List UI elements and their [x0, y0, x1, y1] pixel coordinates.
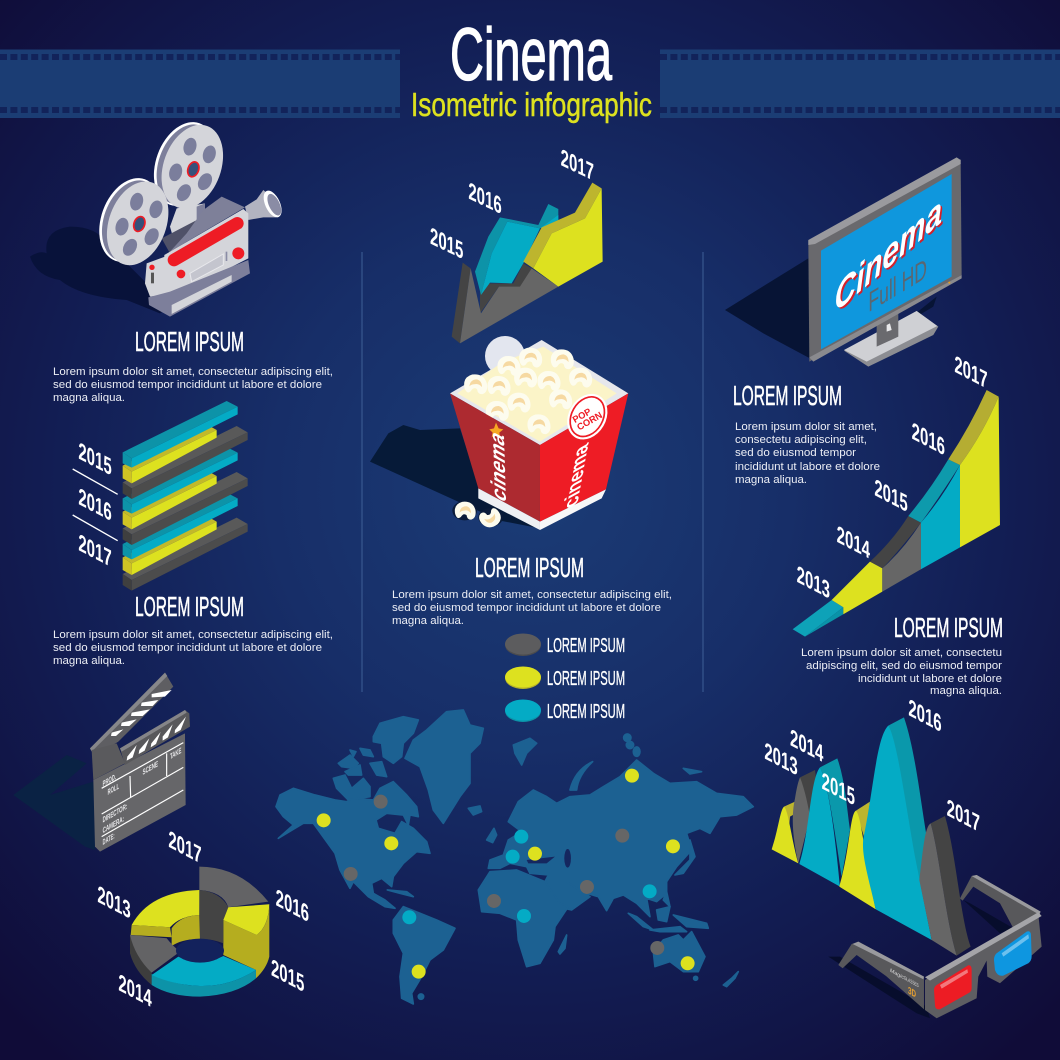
text block: bars: sed do eiusmod tempor incididunt ut labore et dolore [53, 642, 322, 654]
film strip right [660, 50, 1060, 118]
icon: 3d glasses: 3D [908, 985, 916, 1001]
chart: mountain peaks 2013-2017: 2014 [790, 724, 824, 768]
text block: rising area: adipiscing elit, sed do eiusmod tempor [806, 660, 1002, 672]
text block: bars: magna aliqua. [53, 655, 125, 667]
legend: LOREM IPSUM [547, 635, 625, 657]
icon: clapperboard [13, 673, 190, 852]
subtitle: Isometric infographic [411, 86, 652, 123]
text block: tv: consectetu adipiscing elit, [735, 434, 867, 446]
legend [505, 634, 625, 723]
text block: projector: sed do eiusmod tempor incididunt ut labore et dolore [53, 379, 322, 391]
text block: projector: magna aliqua. [53, 392, 125, 404]
icon: clapperboard: SCENE [143, 759, 158, 777]
chart: area 2015-2017: 2015 [430, 222, 463, 265]
icon: 3d glasses: Magic [890, 968, 904, 981]
badge: pop corn: CORN [575, 410, 604, 432]
icon: tv monitor [725, 157, 962, 367]
icon: tv monitor: Cinema [835, 186, 942, 322]
chart: stacked isometric bars: 2017 [78, 529, 112, 573]
badge: pop corn: POP [571, 406, 593, 425]
chart: area 2015-2017: 2016 [468, 177, 502, 220]
chart: isometric donut: 2015 [271, 954, 304, 998]
film strip left [0, 50, 400, 118]
text block: popcorn: sed do eiusmod tempor incididunt ut labore et dolore [392, 602, 661, 614]
heading: projector: LOREM IPSUM [135, 326, 244, 357]
text: cinema left: cinema [486, 426, 511, 506]
text block: popcorn: magna aliqua. [392, 615, 464, 627]
text block: rising area: incididunt ut labore et dolore [858, 673, 1002, 685]
chart: rising area 2013-2017 [793, 351, 1000, 637]
chart: isometric donut: 2014 [118, 969, 152, 1013]
text block: popcorn: Lorem ipsum dolor sit amet, consectetur adipiscing elit, [392, 589, 672, 601]
chart: rising area 2013-2017: 2016 [912, 418, 945, 461]
legend: LOREM IPSUM [547, 668, 625, 690]
chart: area 2015-2017 [430, 144, 603, 343]
text: cinema right face: cinema [560, 438, 594, 514]
chart: mountain peaks 2013-2017: 2016 [908, 694, 942, 738]
icon: tv monitor: Cinema [836, 187, 944, 323]
chart: rising area 2013-2017: 2015 [874, 474, 908, 518]
text block: projector [53, 366, 333, 404]
chart: area 2015-2017: 2017 [561, 144, 594, 187]
text block: projector: Lorem ipsum dolor sit amet, consectetur adipiscing elit, [53, 366, 333, 378]
icon: clapperboard: DATE: [103, 831, 115, 847]
chart: rising area 2013-2017: 2014 [837, 521, 870, 565]
chart: stacked isometric bars: 2016 [78, 483, 112, 527]
icon: clapperboard: PROD. [103, 772, 116, 789]
popcorn kernels on floor [452, 501, 504, 531]
badge: pop corn [559, 387, 615, 447]
text block: bars: Lorem ipsum dolor sit amet, consectetur adipiscing elit, [53, 629, 333, 641]
text block: tv: magna aliqua. [735, 474, 807, 486]
chart: stacked isometric bars: 2015 [78, 438, 112, 481]
chart: isometric donut: 2017 [168, 826, 202, 870]
text block: popcorn [392, 589, 672, 627]
text block: rising area [801, 647, 1002, 697]
heading: bars: LOREM IPSUM [135, 591, 244, 622]
chart: stacked isometric bars [73, 401, 248, 591]
chart: mountain peaks 2013-2017 [764, 694, 980, 956]
title: Cinema [450, 13, 613, 96]
heading: popcorn: LOREM IPSUM [475, 552, 584, 583]
text block: tv [735, 421, 880, 486]
chart: mountain peaks 2013-2017: 2015 [822, 768, 855, 811]
chart: isometric donut: 2013 [97, 881, 131, 925]
chart: isometric donut [97, 826, 309, 1013]
icon: clapperboard: DIRECTOR: [103, 801, 127, 825]
chart: mountain peaks 2013-2017: 2017 [947, 794, 980, 838]
icon: popcorn box [370, 336, 628, 531]
icon: clapperboard: TAKE [170, 745, 181, 761]
chart: isometric donut: 2016 [276, 884, 309, 928]
icon: film projector [30, 113, 285, 317]
legend: LOREM IPSUM [547, 701, 625, 723]
text block: bars [53, 629, 333, 667]
icon: 3d glasses: GLASSES [904, 976, 919, 989]
text block: rising area: magna aliqua. [930, 685, 1002, 697]
icon: tv monitor: Full HD [868, 252, 927, 319]
icon: 3d glasses [828, 875, 1042, 1018]
text block: tv: Lorem ipsum dolor sit amet, [735, 421, 877, 433]
chart: mountain peaks 2013-2017: 2013 [764, 738, 798, 781]
icon: clapperboard: ROLL [108, 781, 119, 797]
text block: tv: sed do eiusmod tempor [735, 447, 856, 459]
text block: tv: incididunt ut labore et dolore [735, 461, 880, 473]
chart: rising area 2013-2017: 2013 [797, 561, 830, 605]
world map [276, 710, 753, 1004]
heading: tv: LOREM IPSUM [733, 380, 842, 411]
chart: rising area 2013-2017: 2017 [954, 351, 988, 395]
icon: clapperboard: CAMERA: [103, 814, 124, 835]
text block: rising area: Lorem ipsum dolor sit amet, consectetu [801, 647, 1002, 659]
